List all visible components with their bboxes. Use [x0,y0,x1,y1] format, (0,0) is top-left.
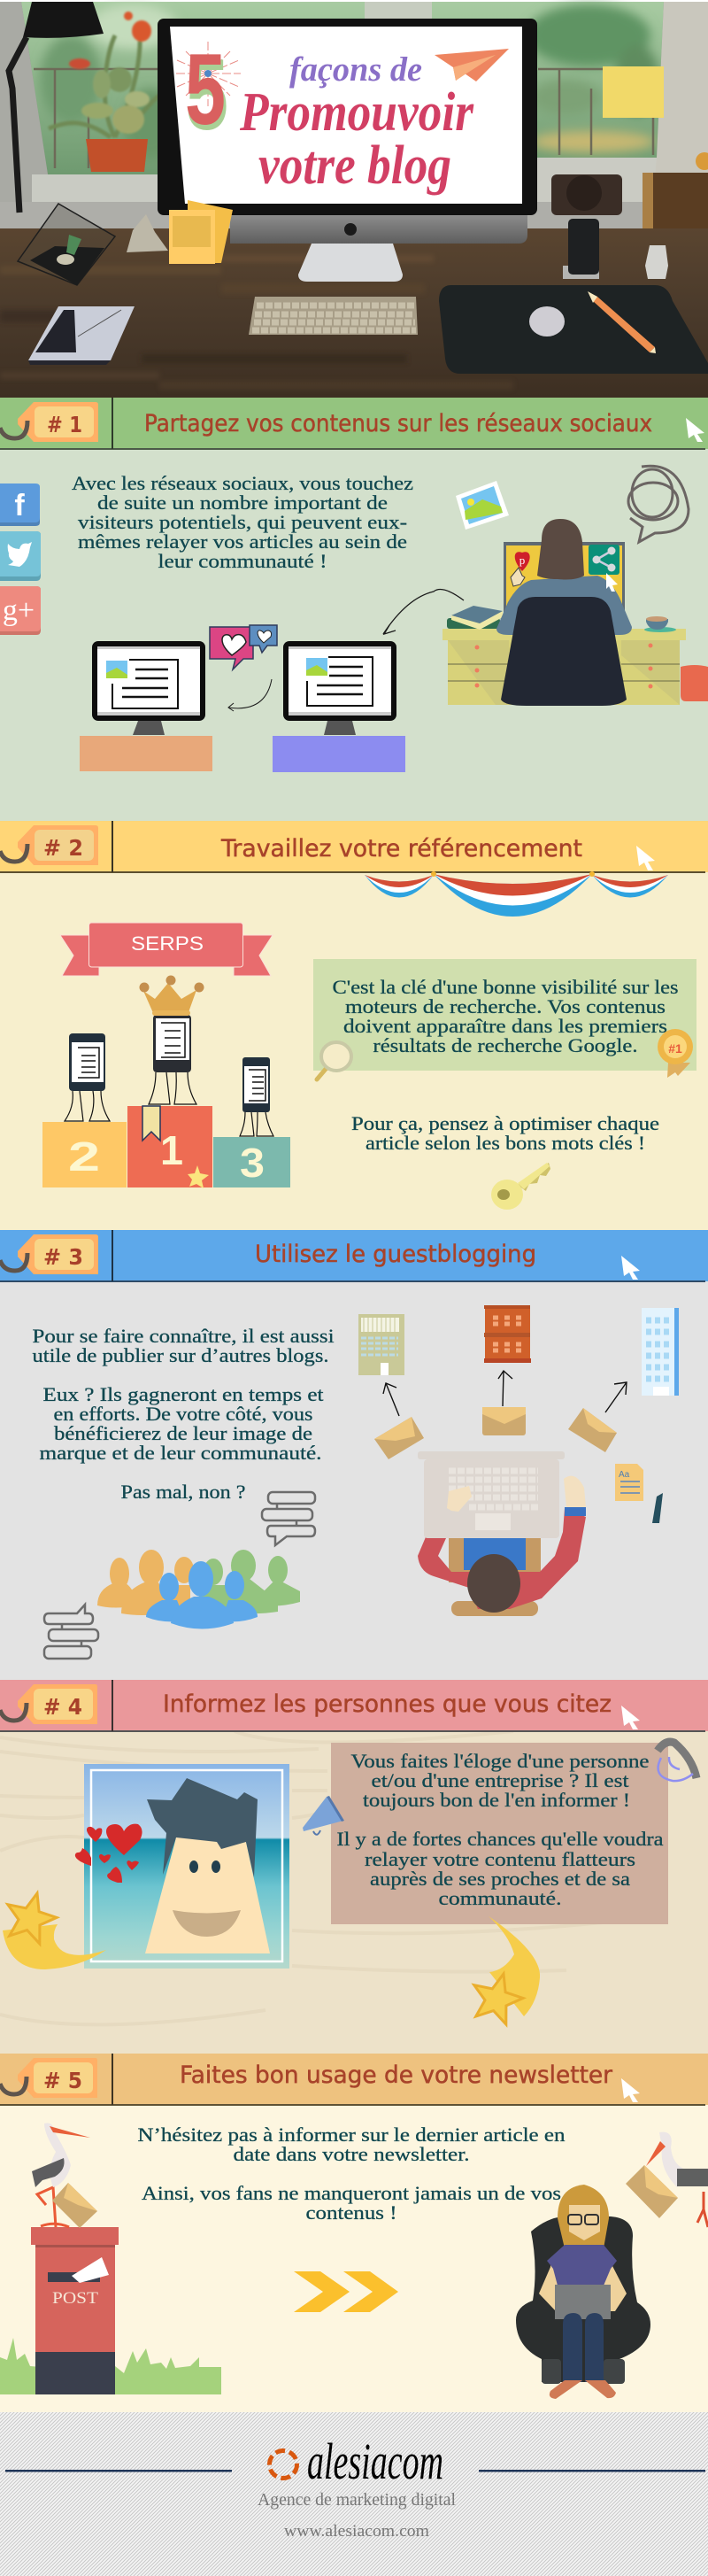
document lines [105,654,178,708]
text block: Pour se faire connaître, il est aussi [32,1325,335,1347]
icon: award ribbon: #1 [668,1041,682,1056]
text block: utile de publier sur d’autres blogs. [32,1344,329,1366]
SERPS banner [60,923,273,976]
shoes [550,2380,616,2399]
crown [140,976,204,1016]
tag number 2: # 2 [43,835,83,861]
panel: section 4 people you cite [0,1680,708,2054]
plant and pot [49,12,159,172]
pencil [588,291,656,353]
green text box: doivent apparaître dans les premiers [343,1015,667,1037]
envelope on mailbox [52,2183,97,2228]
podium [42,1106,290,1188]
desk [442,629,686,705]
paper mountain ornament [127,214,168,252]
green text box: C'est la clé d'une bonne visibilité sur les [333,976,678,998]
header 5 [0,2054,708,2106]
green text box: résultats de recherche Google. [373,1034,637,1056]
hands [447,1476,586,1512]
tag number 5 [0,2058,97,2098]
cup of tea [644,616,676,632]
text block [351,1112,659,1154]
tag number 1 [0,402,98,442]
books [447,606,503,630]
step 2: 2 [68,1133,100,1180]
megaphone [303,1796,344,1835]
envelope left [374,1417,424,1459]
woman body [496,576,632,635]
laptop [418,1451,565,1538]
pink heart bubble [210,627,253,669]
step 1: 1 [160,1127,183,1173]
text block [32,1325,335,1503]
phone character 2 [65,1033,110,1121]
header 2 [0,821,708,873]
hair [558,2185,609,2248]
icon: document [615,1464,643,1501]
envelope center [482,1407,526,1435]
terrarium [18,204,115,285]
step 3 [213,1137,290,1187]
tag number 4: # 4 [43,1694,82,1720]
heading 5: Faites bon usage de votre newsletter [180,2062,613,2089]
cursor icon [621,1706,640,1729]
step 3: 3 [240,1140,265,1186]
header 1 [0,398,708,450]
right monitor base [273,736,405,772]
heading 2: Travaillez votre référencement [220,835,582,863]
logo [269,2433,443,2490]
brown text box: relayer votre contenu flatteurs [365,1848,635,1870]
icon: google plus: g+ [3,594,35,627]
camera [551,174,622,215]
brown text box: auprès de ses proches et de sa [370,1868,630,1890]
text block: Pour ça, pensez à optimiser chaque [351,1112,659,1134]
stork left [32,2123,90,2227]
share button [589,545,620,575]
building: orange [484,1305,531,1363]
screen [170,27,522,204]
step 2 [42,1122,127,1187]
brown text box: toujours bon de l'en informer ! [363,1789,630,1811]
tablet [28,306,135,365]
text block: contenus ! [306,2201,396,2224]
icon: magnifier [317,1042,351,1079]
text block: bénéficierez de leur image de [54,1422,312,1444]
icon: key [491,1163,550,1210]
hearts [75,1824,142,1883]
mailbox [31,2227,119,2394]
group of people [97,1550,300,1629]
arrows to buildings [383,1371,627,1416]
building: blue [642,1308,679,1396]
curved arrow [383,590,464,634]
paper plane [435,49,509,81]
cursor icon [686,418,704,442]
cursor icon [636,846,655,870]
text block: leur communauté ! [158,550,327,572]
blue heart bubble [250,625,277,653]
panel: section 1 social networks [0,398,708,821]
text block: N’hésitez pas à informer sur le dernier article en [138,2123,565,2146]
text block: mêmes relayer vos articles au sein de [78,530,407,553]
green text box [313,959,696,1071]
orange mug [681,665,708,701]
website: www.alesiacom.com [284,2522,429,2541]
phone character 1 with crown [140,976,204,1104]
panel: section 5 newsletter [0,2054,708,2412]
armchair [516,2216,650,2384]
monitor stand [298,244,403,282]
shirt [547,2245,617,2286]
text block: visiteurs potentiels, qui peuvent eux- [78,511,407,533]
chair [501,597,627,706]
stork right [646,2132,708,2227]
grass [0,2338,221,2394]
logo: alesiacom [307,2433,443,2490]
desk lamp [9,2,104,213]
brown text box: Vous faites l'éloge d'une personne [350,1750,650,1772]
icon: telephone headset [658,1742,696,1781]
header 3 [0,1230,708,1282]
brown text box: Il y a de fortes chances qu'elle voudra [336,1828,664,1850]
pinterest heart: p [519,553,525,567]
computer screen [504,542,625,621]
tag number 1: # 1 [47,412,82,437]
text block: Avec les réseaux sociaux, vous touchez [72,472,413,494]
chevron arrows [294,2271,398,2312]
heading line 1: façons de [289,50,422,89]
cursor icon [621,2078,640,2102]
icon: pen [652,1493,663,1523]
hair [467,1554,520,1613]
heading line 2: Promouvoir [239,82,474,143]
tag number 3 [0,1234,98,1274]
mouse pad with mouse [439,285,708,374]
number five: 5 [186,39,228,151]
tag number 5: # 5 [43,2068,82,2093]
SERPS banner: SERPS [131,932,204,955]
step 1 [127,1106,212,1188]
icon: tilted picture [456,481,509,530]
thumbs up [511,568,525,586]
footer [0,2412,708,2576]
sleeves [436,1503,586,1520]
icon: facebook [0,483,40,526]
tag number 2 [0,825,98,865]
icon: document: Aa [619,1470,630,1480]
cursor icon [621,1256,640,1280]
heading 3: Utilisez le guestblogging [255,1241,536,1268]
brown text box: et/ou d'une entreprise ? Il est [372,1769,628,1791]
icon: google plus [0,586,41,635]
phone on dock [563,219,599,279]
apple logo [344,223,357,236]
tag number 3: # 3 [43,1244,83,1270]
title [176,34,509,196]
arms [539,2263,627,2311]
right monitor [283,641,396,735]
heading line 3: votre blog [258,135,451,196]
person at laptop, top view [418,1451,586,1616]
arms [418,1504,586,1609]
window view [21,2,664,174]
cartoon face [145,1778,270,1953]
brown text box: communauté. [439,1887,561,1909]
yellow folders [169,200,233,264]
text block: date dans votre newsletter. [234,2143,469,2165]
bear figurine [645,245,668,279]
text block: marque et de leur communauté. [39,1442,322,1464]
tagline: Agence de marketing digital [258,2490,456,2510]
tag number 4 [0,1684,97,1724]
text block: de suite un nombre important de [97,491,388,514]
text block [72,472,413,572]
text block: en efforts. De votre côté, vous [53,1403,313,1425]
heading 1: Partagez vos contenus sur les réseaux sociaux [144,410,652,437]
icon: facebook: f [14,489,25,522]
moon with star left [3,1893,106,1969]
hero photo: desk with monitor [0,2,708,398]
small curved arrow [228,679,272,711]
photo portrait [84,1764,289,1969]
small cursor [606,573,618,592]
moon with star right [474,1916,540,2024]
panel: section 2 SEO [0,821,708,1230]
text block: article selon les bons mots clés ! [366,1132,645,1154]
legs [563,2313,604,2382]
towel [603,66,664,118]
text block: Pas mal, non ? [120,1481,246,1503]
brown text box [331,1743,668,1924]
chair and legs [449,1538,541,1616]
envelope right [626,2165,678,2218]
glasses [568,2215,598,2224]
text block: Eux ? Ils gagneront en temps et [42,1383,324,1405]
keyboard [249,297,418,335]
left monitor [92,641,205,735]
window frame [0,2,708,228]
left monitor base [80,736,212,771]
text block [138,2123,565,2224]
face [569,2205,600,2240]
desk surface [0,228,708,398]
monitor [158,19,537,282]
social buttons [0,483,41,635]
phone character 3 [240,1057,273,1136]
building: green [358,1314,404,1375]
woman at computer [442,519,686,706]
text block: Ainsi, vos fans ne manqueront jamais un de vos [142,2182,561,2204]
envelope right [568,1408,617,1452]
icon: award ribbon [658,1029,693,1078]
number five: 5 [185,34,226,146]
scribble speech bubble [628,466,689,542]
hair [537,519,584,579]
wood block lamp [643,152,708,245]
mailbox: POST [52,2289,98,2308]
bunting [365,871,668,917]
panel: section 3 guest blogging [0,1230,708,1680]
header 4 [0,1680,708,1732]
chat bubbles bottom [44,1605,98,1659]
woman in armchair [516,2185,650,2399]
document lines [304,654,373,706]
chat bubbles top [262,1492,315,1545]
green text box: moteurs de recherche. Vos contenus [345,995,666,1017]
laptop [555,2285,611,2319]
heading 4: Informez les personnes que vous citez [163,1690,612,1718]
icon: twitter [0,531,41,581]
